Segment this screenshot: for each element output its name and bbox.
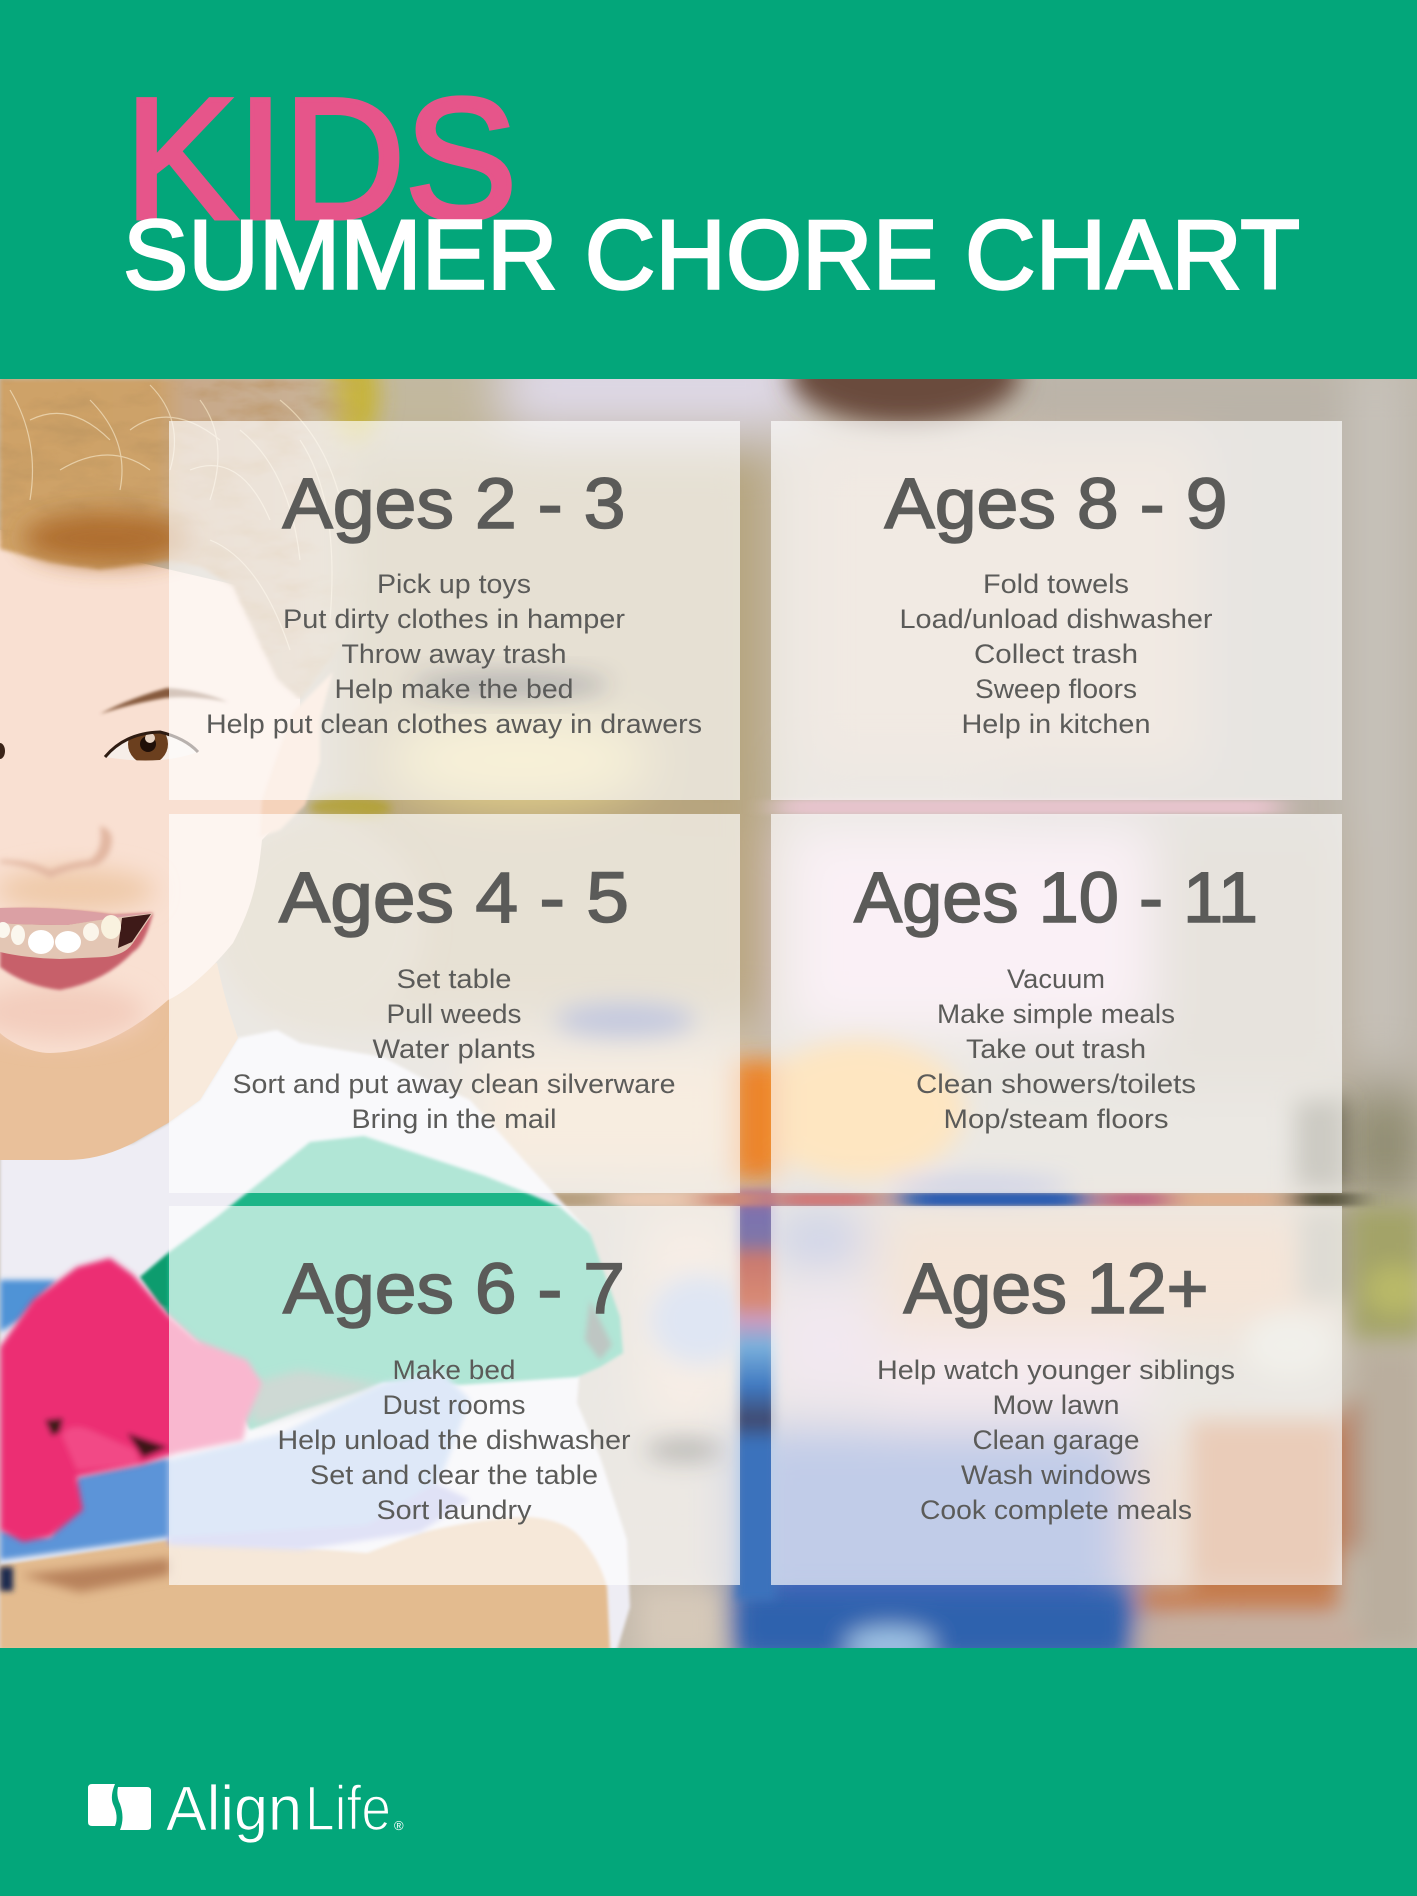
panel: ages 8-9 (771, 421, 1342, 800)
face (0, 530, 300, 1053)
ear (260, 672, 333, 837)
chore list: ages 10-11: Clean showers/toilets (916, 1069, 1196, 1099)
title: SUMMER CHORE CHART: SUMMER CHORE CHART (123, 200, 1300, 310)
chore list: ages 10-11: Mop/steam floors (944, 1104, 1168, 1134)
logo wordmark: Align: Align (166, 1774, 302, 1844)
panel: ages 10-11 (771, 814, 1342, 1193)
heading: ages 10-11: Ages 10 - 11 (854, 859, 1258, 938)
chore list: ages 8-9 (900, 569, 1213, 739)
heading: ages 2-3: Ages 2 - 3 (282, 465, 626, 544)
chore list: ages 4-5: Bring in the mail (352, 1104, 556, 1134)
chore list: ages 8-9: Collect trash (974, 639, 1138, 669)
chore list: ages 2-3: Pick up toys (377, 569, 531, 599)
chore list: ages 12+: Help watch younger siblings (877, 1355, 1235, 1385)
registered mark: ® (394, 1818, 404, 1833)
chore list: ages 12+ (877, 1355, 1235, 1525)
blue towel (0, 1280, 470, 1591)
photo background (0, 325, 1417, 1663)
panel: ages 2-3 (169, 421, 740, 800)
chore list: ages 6-7 (278, 1355, 631, 1525)
loose hair behind neck (238, 806, 361, 1004)
panel: ages 6-7 (169, 1206, 740, 1585)
pink towel (0, 1258, 262, 1542)
chore list: ages 2-3 (206, 569, 702, 739)
chore list: ages 6-7: Set and clear the table (310, 1460, 598, 1490)
blurred kitchen background (0, 325, 1417, 1663)
eyebrow (100, 688, 228, 714)
icon: logo mark (88, 1784, 151, 1830)
mouth (0, 908, 153, 990)
chin shading (0, 984, 145, 1040)
chore list: ages 2-3: Help put clean clothes away in drawers (206, 709, 702, 739)
nose (0, 826, 112, 878)
chore list: ages 2-3: Throw away trash (342, 639, 566, 669)
logo: AlignLife (88, 1774, 404, 1844)
chore list: ages 4-5 (232, 964, 676, 1134)
chore list: ages 8-9: Load/unload dishwasher (900, 604, 1213, 634)
chore list: ages 6-7: Dust rooms (382, 1390, 526, 1420)
left eye (104, 730, 199, 760)
chore list: ages 12+: Cook complete meals (920, 1495, 1192, 1525)
title: KIDS: KIDS (125, 63, 517, 255)
chore list: ages 12+: Clean garage (972, 1425, 1140, 1455)
hand shadow (20, 1558, 170, 1592)
arm (0, 1517, 610, 1650)
fringe shadow (23, 512, 193, 564)
chore list: ages 10-11 (916, 964, 1196, 1134)
heading: ages 12+: Ages 12+ (904, 1250, 1208, 1329)
chore list: ages 2-3: Help make the bed (334, 674, 574, 704)
t-shirt (0, 1030, 630, 1650)
panel: ages 12+ (771, 1206, 1342, 1585)
area around mouth (0, 868, 155, 912)
chore list: ages 10-11: Vacuum (1007, 964, 1105, 994)
light hair strands (10, 385, 345, 650)
panel: ages 4-5 (169, 814, 740, 1193)
horizontal gap colour strip (525, 800, 1355, 1206)
chore list: ages 12+: Wash windows (961, 1460, 1151, 1490)
chore list: ages 6-7: Help unload the dishwasher (278, 1425, 631, 1455)
chore list: ages 8-9: Help in kitchen (962, 709, 1150, 739)
neck (0, 963, 238, 1160)
towel shadow (245, 1370, 383, 1425)
chore list: ages 4-5: Pull weeds (386, 999, 522, 1029)
chore list: ages 4-5: Water plants (372, 1034, 536, 1064)
heading: ages 6-7: Ages 6 - 7 (283, 1250, 625, 1329)
chore list: ages 10-11: Take out trash (966, 1034, 1146, 1064)
chore list: ages 8-9: Fold towels (983, 569, 1129, 599)
mint towel (140, 1136, 623, 1430)
logo wordmark: Life: Life (305, 1774, 391, 1844)
towel fold (585, 1300, 612, 1360)
chore list: ages 6-7: Sort laundry (376, 1495, 532, 1525)
chore list: ages 10-11: Make simple meals (937, 999, 1175, 1029)
vertical gap colour strip (736, 1190, 776, 1600)
chore list: ages 6-7: Make bed (392, 1355, 516, 1385)
chore list: ages 2-3: Put dirty clothes in hamper (283, 604, 625, 634)
chore list: ages 12+: Mow lawn (992, 1390, 1120, 1420)
chore list: ages 8-9: Sweep floors (975, 674, 1137, 704)
heading: ages 4-5: Ages 4 - 5 (279, 859, 629, 938)
heading: ages 8-9: Ages 8 - 9 (884, 465, 1228, 544)
chore list: ages 4-5: Set table (396, 964, 512, 994)
hair (0, 379, 370, 699)
second eye edge (0, 743, 5, 759)
girl (0, 379, 630, 1650)
chore list: ages 4-5: Sort and put away clean silverware (232, 1069, 676, 1099)
